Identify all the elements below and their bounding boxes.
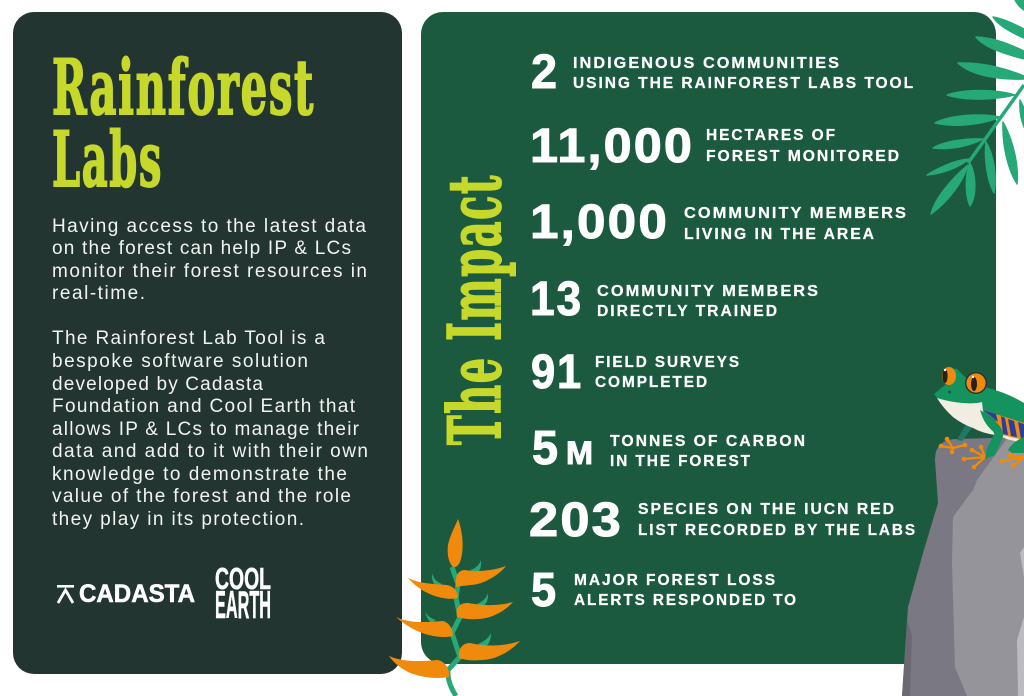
stat: 11,000 hectares	[530, 120, 901, 173]
illustration: rock	[902, 437, 1024, 696]
stat: 2 communities	[531, 46, 915, 99]
stat: 203 species: LIST RECORDED BY THE LABS	[638, 522, 917, 539]
stat: 91 surveys	[531, 346, 741, 399]
stat: 2 communities: INDIGENOUS COMMUNITIES	[573, 55, 841, 72]
text block: intro paragraph: monitor their forest resources in	[52, 261, 367, 282]
stat: 5M tonnes: M	[566, 435, 595, 471]
stat: 1,000 members: 1,000	[530, 196, 669, 249]
stat: 5 alerts: ALERTS RESPONDED TO	[574, 592, 798, 609]
stat: 5 alerts	[531, 564, 798, 617]
logo: Cool Earth: COOL	[215, 561, 271, 596]
panel: the impact	[421, 12, 996, 664]
stat: 1,000 members: LIVING IN THE AREA	[684, 226, 876, 243]
stat: 13 trained	[530, 273, 820, 326]
title: Labs	[52, 115, 163, 204]
text block: intro paragraph: on the forest can help IP & LCs	[52, 238, 351, 259]
stat: 13 trained: 13	[530, 273, 583, 326]
text: EARTH	[215, 584, 271, 627]
text block: tool description: value of the forest and the role	[52, 486, 351, 507]
stat: 2 communities: USING THE RAINFOREST LABS TOOL	[573, 75, 915, 92]
text block: tool description: developed by Cadasta	[52, 374, 263, 395]
stat: 5M tonnes	[532, 422, 807, 475]
stat: 5M tonnes: TONNES OF CARBON	[610, 433, 807, 450]
icon: heliconia flower	[389, 519, 520, 696]
text block: tool description: allows IP & LCs to manage their	[52, 419, 360, 440]
stat: 5M tonnes: 5	[532, 422, 560, 475]
stat: 13 trained: DIRECTLY TRAINED	[597, 303, 779, 320]
stat: 203 species: 203	[529, 494, 623, 547]
stat: 91 surveys: FIELD SURVEYS	[595, 354, 741, 371]
stat: 5 alerts: MAJOR FOREST LOSS	[574, 572, 777, 589]
text block: tool description: bespoke software solution	[52, 351, 308, 372]
text block: intro paragraph	[52, 216, 367, 304]
stat: 91 surveys: 91	[531, 346, 583, 399]
stat: 91 surveys: COMPLETED	[595, 374, 709, 391]
stat: 11,000 hectares: 11,000	[530, 120, 694, 173]
text block: tool description: data and add to it with their own	[52, 441, 368, 462]
text block: intro paragraph: Having access to the latest data	[52, 216, 366, 237]
stat: 1,000 members	[530, 196, 908, 249]
logo: Cadasta: CADASTA	[79, 580, 195, 608]
title	[52, 43, 315, 204]
text block: tool description	[52, 328, 368, 530]
text block: tool description: they play in its protection.	[52, 509, 304, 530]
text block: tool description: The Rainforest Lab Tool is a	[52, 328, 325, 349]
text block: intro paragraph: real-time.	[52, 283, 145, 304]
logo: Cool Earth	[215, 561, 271, 627]
stat: 1,000 members: COMMUNITY MEMBERS	[684, 205, 908, 222]
stat: 5M tonnes: IN THE FOREST	[610, 453, 752, 470]
stat: 13 trained: COMMUNITY MEMBERS	[597, 283, 820, 300]
stat: 2 communities: 2	[531, 46, 559, 99]
illustration: tree frog	[934, 367, 1024, 469]
stat: 5 alerts: 5	[531, 564, 558, 617]
icon: palm leaf	[927, 0, 1024, 214]
stat: 203 species	[529, 494, 917, 547]
panel: left intro	[13, 12, 402, 674]
title: Rainforest	[52, 43, 315, 132]
stat: 203 species: SPECIES ON THE IUCN RED	[638, 501, 896, 518]
text block: tool description: knowledge to demonstrate the	[52, 464, 347, 485]
stat: 11,000 hectares: FOREST MONITORED	[706, 148, 901, 165]
text block: tool description: Foundation and Cool Earth that	[52, 396, 356, 417]
stat: 11,000 hectares: HECTARES OF	[706, 127, 837, 144]
